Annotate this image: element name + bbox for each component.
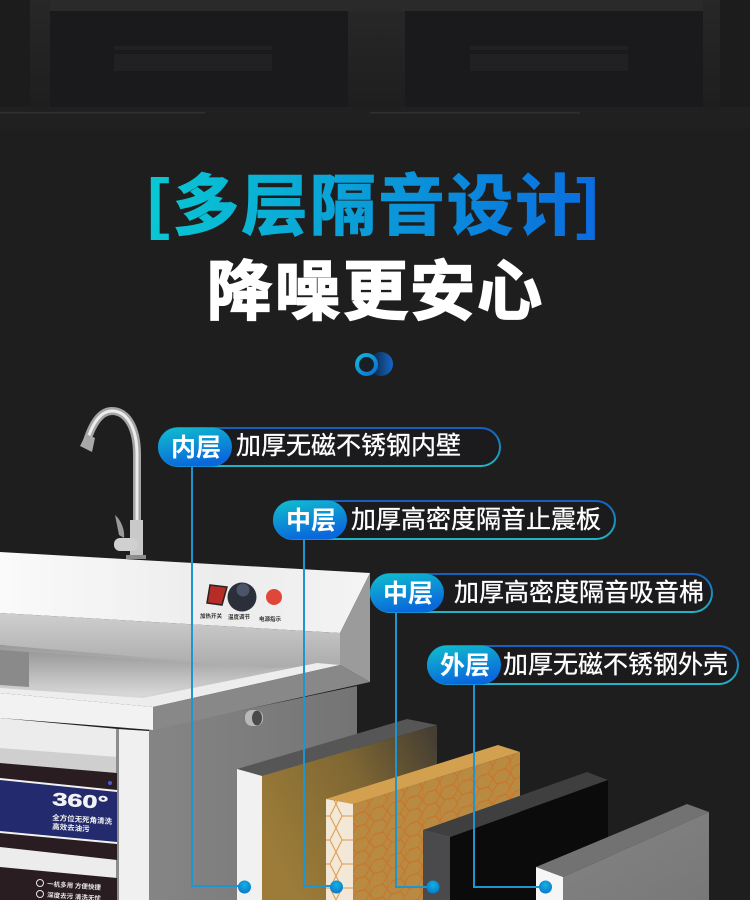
callout: middle layer board: 加厚高密度隔音止震板 — [351, 506, 601, 534]
callout: middle layer board — [273, 500, 615, 540]
callout: middle layer foam — [370, 574, 712, 612]
layer 3: black sound absorbing foam — [423, 772, 608, 900]
control panel: switch, knob, indicator: 电源指示 — [259, 615, 282, 623]
callout: outer layer: 外层 — [440, 652, 490, 680]
temperature knob — [228, 582, 256, 612]
basin — [0, 645, 340, 700]
callout: middle layer foam: 加厚高密度隔音吸音棉 — [454, 579, 704, 607]
cabinet front: 全方位无死角清洗 — [52, 812, 113, 826]
callout: inner layer: 加厚无磁不锈钢内壁 — [236, 432, 461, 460]
sink cabinet — [0, 552, 370, 900]
connector: outer layer — [474, 684, 552, 894]
callout: middle layer foam: 中层 — [383, 580, 433, 608]
indicator button — [266, 589, 282, 605]
title: 多层隔音设计: [ — [147, 165, 170, 241]
callout: middle layer board: 中层 — [286, 507, 336, 535]
callout: outer layer: 加厚无磁不锈钢外壳 — [503, 651, 728, 679]
rocker switch — [207, 585, 227, 605]
counter edge — [0, 663, 340, 707]
drain fitting — [245, 710, 263, 726]
callout: outer layer — [427, 646, 738, 684]
connector: middle layer foam — [396, 612, 440, 894]
backsplash lower — [0, 613, 340, 668]
cabinet front: 一机多用 方便快捷 — [47, 879, 102, 892]
faucet — [80, 411, 146, 559]
cabinet front: 高效去油污 — [52, 821, 90, 834]
layer 1: stainless inner wall — [237, 719, 437, 900]
background shelf at top — [0, 0, 750, 129]
title: 多层隔音设计: ] — [576, 165, 599, 241]
cabinet side body — [149, 686, 357, 900]
backsplash top — [0, 552, 370, 633]
connector: inner layer — [192, 466, 251, 894]
layer 2: honeycomb damping board — [326, 745, 520, 900]
subtitle: 降噪更安心: 降噪更安心 — [207, 255, 542, 328]
control panel: switch, knob, indicator — [200, 582, 282, 623]
cabinet front — [0, 718, 149, 900]
callout: inner layer: 内层 — [171, 434, 221, 462]
layer 4: stainless outer shell — [536, 804, 709, 900]
connector: middle layer board — [304, 539, 343, 894]
callout: inner layer — [158, 428, 500, 466]
control panel: switch, knob, indicator: 温度调节 — [228, 613, 251, 621]
control labels: 加热开关 — [200, 612, 223, 620]
title: 多层隔音设计: 多层隔音设计 — [173, 169, 582, 243]
logo text: 360° — [52, 789, 109, 813]
icon: double ring — [357, 352, 393, 376]
